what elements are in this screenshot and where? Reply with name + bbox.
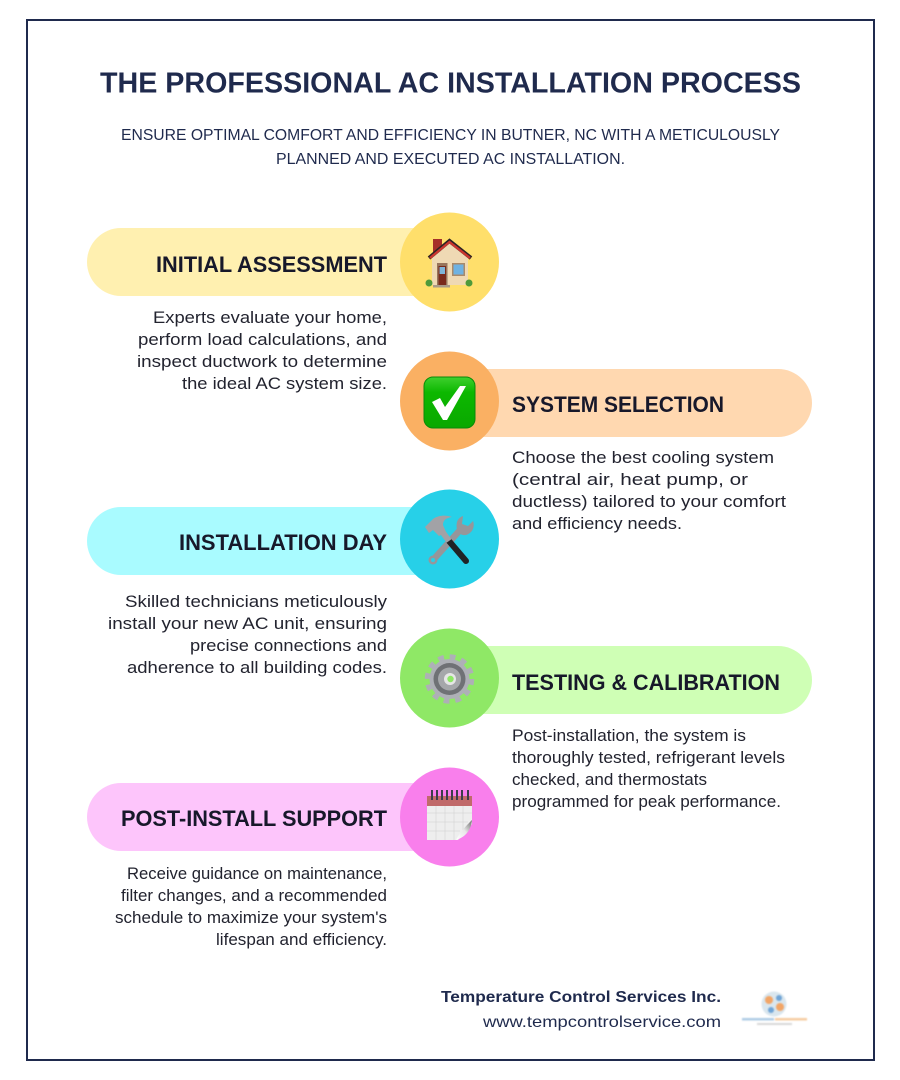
- heading pill: post-install support: [87, 783, 447, 851]
- text: system selection: and efficiency needs.: [512, 514, 682, 533]
- text: testing and calibration: [512, 726, 785, 811]
- text: initial assessment: [137, 308, 387, 393]
- panel: system selection: [400, 352, 812, 533]
- heading: testing and calibration: TESTING & CALIBRATION: [512, 670, 780, 695]
- heading pill: testing and calibration: [452, 646, 812, 714]
- badge circle: testing and calibration: [400, 628, 499, 728]
- footer company name: Temperature Control Services Inc.: [441, 989, 721, 1006]
- text: system selection: (central air, heat pump, or: [512, 470, 748, 489]
- text: testing and calibration: Post-installation, the system is: [512, 726, 746, 745]
- icon: hammer and wrench: [425, 516, 474, 564]
- text: system selection: ductless) tailored to your comfort: [512, 492, 786, 511]
- heading pill: installation day: [87, 507, 447, 575]
- badge circle: post-install support: [400, 768, 499, 866]
- panel: initial assessment: [87, 212, 499, 393]
- panel: post-install support: [87, 768, 499, 949]
- text: installation day: adherence to all building codes.: [127, 658, 387, 677]
- text: system selection: Choose the best cooling system: [512, 448, 774, 467]
- text: post-install support: schedule to maximize your system's: [115, 908, 387, 927]
- subtitle: PLANNED AND EXECUTED AC INSTALLATION.: [276, 151, 625, 168]
- badge circle: installation day: [400, 490, 499, 588]
- title: THE PROFESSIONAL AC INSTALLATION PROCESS: [100, 68, 801, 100]
- heading pill: initial assessment: [87, 228, 447, 296]
- text: initial assessment: Experts evaluate your home,: [153, 308, 387, 327]
- text: installation day: [108, 592, 388, 677]
- icon: house: [426, 239, 472, 288]
- subtitle: [121, 127, 780, 168]
- text: initial assessment: perform load calculations, and: [138, 330, 387, 349]
- footer logo: [742, 992, 807, 1025]
- text: initial assessment: the ideal AC system size.: [182, 374, 387, 393]
- icon: check mark: [424, 377, 475, 428]
- text: installation day: precise connections and: [190, 636, 387, 655]
- heading: installation day: INSTALLATION DAY: [179, 530, 387, 555]
- text: post-install support: filter changes, and a recommended: [121, 886, 387, 905]
- text: installation day: install your new AC unit, ensuring: [108, 614, 387, 633]
- text: testing and calibration: programmed for peak performance.: [512, 792, 781, 811]
- footer website: www.tempcontrolservice.com: [482, 1014, 721, 1031]
- icon: calendar: [427, 790, 472, 840]
- text: testing and calibration: thoroughly tested, refrigerant levels: [512, 748, 785, 767]
- panel: installation day: [87, 490, 499, 677]
- panel: testing and calibration: [400, 628, 812, 811]
- text: system selection: [512, 448, 786, 533]
- heading: initial assessment: INITIAL ASSESSMENT: [156, 252, 388, 277]
- heading: post-install support: POST-INSTALL SUPPORT: [121, 806, 388, 831]
- text: post-install support: lifespan and efficiency.: [216, 930, 387, 949]
- icon: gear: [428, 658, 471, 700]
- badge circle: initial assessment: [400, 212, 499, 312]
- heading pill: system selection: [452, 369, 812, 437]
- badge circle: system selection: [400, 352, 499, 450]
- heading: system selection: SYSTEM SELECTION: [512, 392, 724, 417]
- text: testing and calibration: checked, and thermostats: [512, 770, 707, 789]
- subtitle: ENSURE OPTIMAL COMFORT AND EFFICIENCY IN BUTNER, NC WITH A METICULOUSLY: [121, 127, 780, 144]
- text: initial assessment: inspect ductwork to determine: [137, 352, 387, 371]
- text: post-install support: Receive guidance on maintenance,: [127, 864, 387, 883]
- text: post-install support: [115, 864, 387, 949]
- text: installation day: Skilled technicians meticulously: [125, 592, 388, 611]
